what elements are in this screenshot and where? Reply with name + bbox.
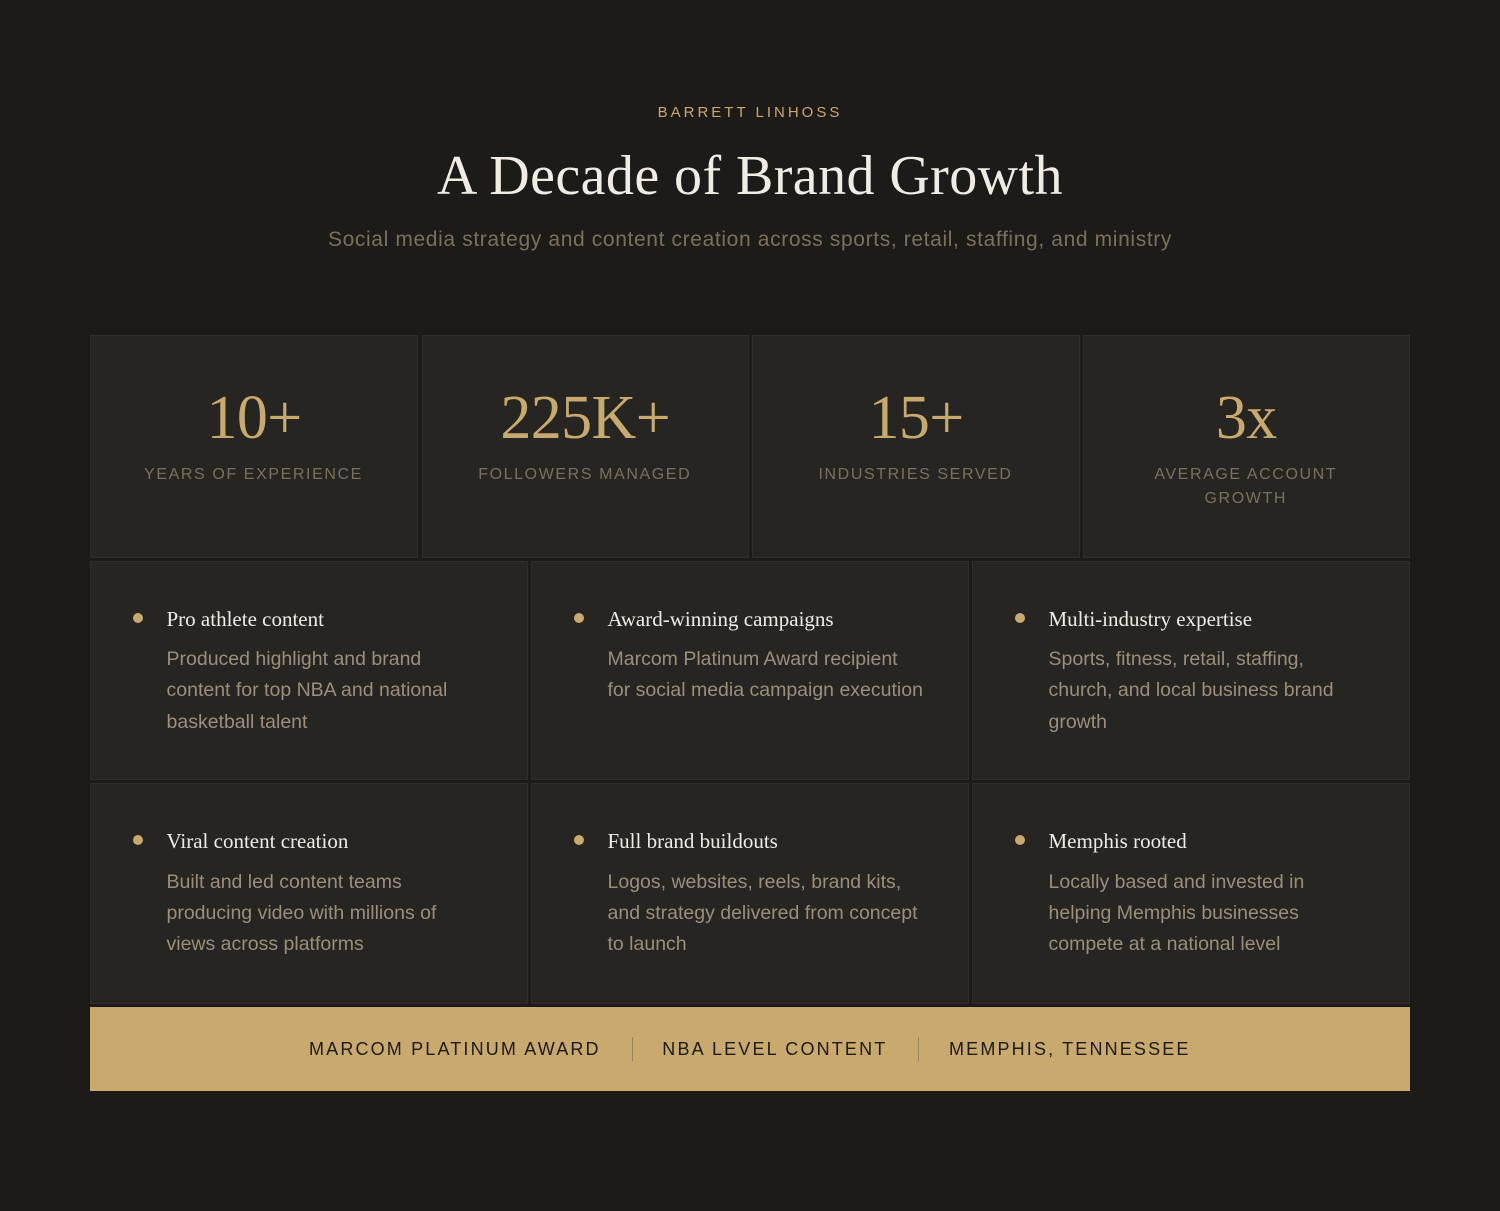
panel: stat years <box>90 335 418 558</box>
stat label: AVERAGE ACCOUNT <box>1154 466 1337 483</box>
title: A Decade of Brand Growth <box>437 145 1063 207</box>
stat label: GROWTH <box>1204 490 1287 507</box>
stat number: 225K+ <box>500 384 670 452</box>
panel: award-winning campaigns <box>531 561 969 780</box>
description: Produced highlight and brand <box>166 648 421 670</box>
heading: Memphis rooted <box>1048 829 1187 853</box>
eyebrow: BARRETT LINHOSS <box>658 104 842 121</box>
bullet icon <box>574 835 584 845</box>
panel: stat growth <box>1082 335 1410 558</box>
heading: Full brand buildouts <box>608 829 778 853</box>
description: growth <box>1048 711 1107 733</box>
heading: Pro athlete content <box>166 607 324 631</box>
panel: stat industries <box>752 335 1080 558</box>
description: and strategy delivered from concept <box>608 902 918 924</box>
bullet icon <box>133 835 143 845</box>
stat label: YEARS OF EXPERIENCE <box>144 466 363 483</box>
description: for social media campaign execution <box>608 679 923 701</box>
description: Built and led content teams <box>166 871 402 893</box>
description: content for top NBA and national <box>166 679 447 701</box>
panel: memphis rooted <box>972 783 1410 1004</box>
description <box>166 648 447 733</box>
panel: full brand buildouts <box>531 783 969 1004</box>
description: Logos, websites, reels, brand kits, <box>608 871 901 893</box>
stat label: FOLLOWERS MANAGED <box>478 466 691 483</box>
bullet icon <box>1015 835 1025 845</box>
heading: Viral content creation <box>166 829 348 853</box>
footer item: nba: NBA LEVEL CONTENT <box>662 1039 887 1059</box>
description <box>1048 871 1304 955</box>
description: helping Memphis businesses <box>1048 902 1299 924</box>
bullet icon <box>574 613 584 623</box>
stat label <box>1154 466 1337 507</box>
description: basketball talent <box>166 711 307 733</box>
stat number: 3x <box>1216 384 1277 452</box>
description <box>608 871 918 955</box>
description: views across platforms <box>166 933 364 955</box>
panel: pro athlete content <box>90 561 528 780</box>
description <box>1048 648 1334 733</box>
bullet icon <box>1015 613 1025 623</box>
panel: multi-industry expertise <box>972 561 1410 780</box>
description: Marcom Platinum Award recipient <box>608 648 898 670</box>
footer item: memphis: MEMPHIS, TENNESSEE <box>949 1039 1191 1059</box>
description: producing video with millions of <box>166 902 436 924</box>
subtitle: Social media strategy and content creation across sports, retail, staffing, and ministry <box>328 228 1172 251</box>
description: to launch <box>608 933 687 955</box>
footer item: award: MARCOM PLATINUM AWARD <box>309 1039 601 1059</box>
description <box>608 648 923 701</box>
panel: stat followers <box>422 335 749 558</box>
stat label: INDUSTRIES SERVED <box>818 466 1013 483</box>
panel: viral content creation <box>90 783 528 1004</box>
description <box>166 871 436 955</box>
heading: Award-winning campaigns <box>608 607 834 631</box>
stat number: 10+ <box>206 384 302 452</box>
bullet icon <box>133 613 143 623</box>
stat number: 15+ <box>868 384 964 452</box>
heading: Multi-industry expertise <box>1048 607 1252 631</box>
description: church, and local business brand <box>1048 679 1334 701</box>
footer banner <box>90 1007 1410 1091</box>
description: Sports, fitness, retail, staffing, <box>1048 648 1304 670</box>
description: Locally based and invested in <box>1048 871 1304 893</box>
description: compete at a national level <box>1048 933 1280 955</box>
